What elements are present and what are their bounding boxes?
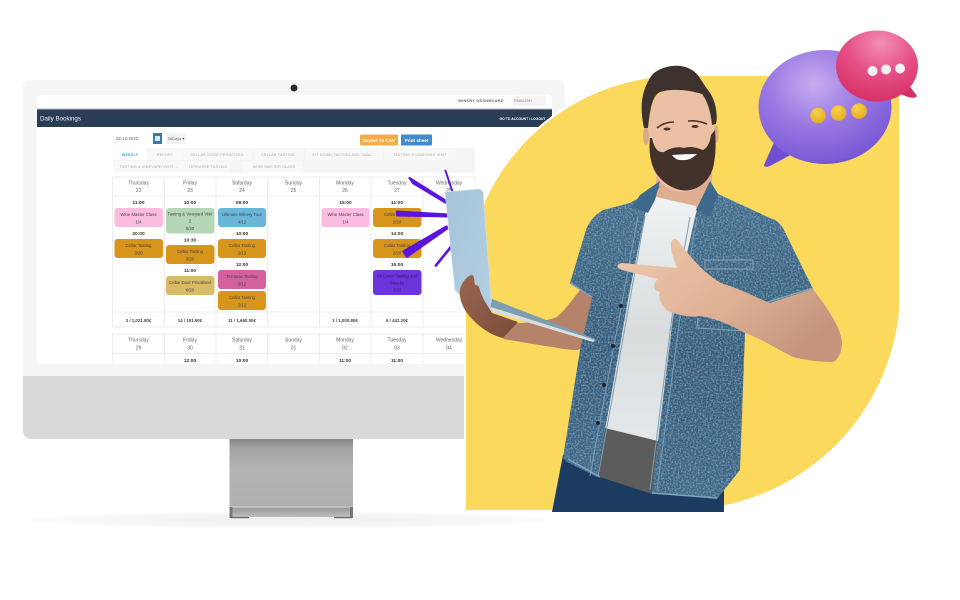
neck	[655, 165, 712, 212]
calendar week 1 day headers: Thursday	[128, 180, 149, 186]
calendar week 1 day headers: 22	[136, 188, 141, 194]
tabs	[113, 148, 475, 173]
calendar week 2: Monday	[336, 338, 354, 344]
calendar week 2: 30	[187, 346, 193, 352]
camera	[290, 84, 298, 92]
laptop base	[490, 299, 595, 341]
sleeve hems	[568, 283, 813, 498]
navy header bar	[37, 110, 552, 127]
Friday bookings: 5/20	[186, 226, 195, 231]
calendar week 1 day headers: Friday	[183, 180, 197, 186]
white t-shirt	[605, 196, 700, 441]
print button: Print sheet	[405, 138, 429, 143]
Thursday bookings: 1/4	[136, 220, 142, 224]
calendar week 2: 31	[239, 346, 245, 352]
tabs: TASTING & VINEYARD VISIT ...	[120, 165, 178, 169]
Tuesday bookings: Cellar Tasting	[384, 212, 411, 217]
tabs: CELLAR DOOR PRIVATISED	[190, 153, 244, 157]
Friday bookings: Cellar Door Privatised	[169, 280, 212, 285]
week 1 totals: 14 / 191.50€	[178, 318, 203, 323]
man holding laptop	[445, 66, 842, 512]
pockets	[697, 260, 753, 331]
monitor body	[23, 80, 565, 439]
Tuesday bookings: 15:00	[391, 262, 403, 268]
Tuesday bookings: 14:00	[391, 231, 403, 237]
calendar week 2: 11:00	[391, 358, 403, 364]
export button: Export To CSV	[363, 138, 396, 143]
Saturday bookings: Cellar Tasting	[229, 295, 256, 300]
Friday bookings: 10:30	[184, 238, 196, 244]
left forearm	[503, 290, 596, 350]
week 1 totals: 11 / 1,660.00€	[228, 318, 256, 323]
navy header bar: Daily Bookings	[40, 116, 81, 122]
calendar week 2	[112, 334, 475, 364]
Friday bookings: Cellar Tasting	[177, 249, 204, 254]
Tuesday bookings: 11:00	[391, 200, 403, 206]
purple highlight rays	[397, 170, 453, 267]
calendar week 2: 10:00	[236, 358, 248, 364]
navy header bar: GO TO ACCOUNT / LOGOUT	[500, 117, 546, 121]
calendar week 2: Saturday	[232, 338, 253, 344]
week 1 totals: 1 / 1,000.80€	[332, 318, 358, 323]
Saturday bookings: 12:00	[236, 262, 248, 268]
date controls	[116, 133, 186, 144]
calendar week 1 day headers: 25	[291, 188, 296, 194]
screen: bookings app	[37, 95, 552, 364]
Friday bookings: 11:00	[184, 268, 196, 274]
yellow background shape	[466, 76, 899, 510]
Tuesday bookings: Cellar Tasting	[384, 243, 411, 248]
calendar week 1 day headers: Monday	[336, 180, 354, 186]
white dots	[868, 64, 905, 76]
Tuesday bookings: Sit Down Tasting and	[377, 274, 418, 278]
tabs: CELLAR TASTING	[261, 153, 295, 157]
plackets	[590, 216, 697, 490]
Saturday bookings: 2/12	[238, 302, 247, 308]
Friday bookings: 10:00	[184, 200, 196, 206]
hair	[642, 66, 717, 128]
monitor shadow	[15, 511, 565, 529]
chat bubble pink	[836, 30, 918, 102]
week 1 totals: 3 / 1,021.80€	[126, 318, 152, 323]
calendar week 1 day headers: Saturday	[232, 180, 253, 186]
top bar: WINERY DASHBOARD	[458, 99, 504, 103]
Saturday bookings: Ultimate Winery Tour	[222, 212, 262, 217]
grey undershirt	[597, 428, 658, 494]
chat bubble purple	[758, 50, 892, 167]
Thursday bookings	[114, 200, 163, 258]
tabs: SIT DOWN TASTING AND SNAC...	[312, 153, 376, 157]
calendar week 1 day headers	[128, 180, 463, 194]
Tuesday bookings: 2/20	[393, 250, 402, 256]
laptop lid	[445, 189, 492, 311]
laptop base edge	[490, 307, 595, 342]
Saturday bookings: 5/12	[238, 282, 247, 286]
Thursday bookings: 20:00	[132, 231, 145, 237]
beard	[649, 130, 716, 190]
export button	[360, 134, 398, 146]
Tuesday bookings	[373, 200, 422, 295]
top bar	[37, 96, 552, 110]
calendar week 1 day headers: 27	[394, 188, 400, 194]
calendar week 2: 01	[291, 346, 296, 352]
face	[648, 89, 714, 192]
Saturday bookings: Cellar Tasting	[229, 243, 256, 248]
print button	[401, 134, 432, 146]
calendar week 1 day headers: 26	[342, 188, 348, 194]
collar	[632, 181, 660, 213]
Thursday bookings: 3/20	[134, 250, 143, 256]
Monday bookings: Wine Master Class	[327, 212, 364, 217]
calendar week 1 day headers: 24	[239, 188, 245, 194]
monitor stand	[230, 439, 353, 518]
Monday bookings	[322, 200, 370, 227]
calendar week 2: 29	[136, 346, 141, 352]
Tuesday bookings: 2/12	[393, 288, 402, 292]
Tuesday bookings: Snacks	[390, 280, 404, 286]
calendar week 2: Thursday	[128, 338, 149, 344]
Saturday bookings: Terrasse Tasting	[226, 274, 258, 279]
Friday bookings: 3/20	[186, 256, 195, 262]
date controls: 28Days ▾	[168, 136, 184, 141]
Tuesday bookings: 2/20	[393, 220, 402, 224]
Saturday bookings: 09:00	[236, 200, 248, 206]
Saturday bookings	[218, 200, 266, 310]
Monday bookings: 15:00	[339, 200, 352, 206]
date controls: 22-12-2022	[116, 136, 139, 141]
yellow dots	[810, 103, 867, 123]
smile	[672, 154, 697, 160]
Saturday bookings: 2/12	[238, 250, 247, 256]
calendar week 1 day headers: Tuesday	[388, 180, 407, 186]
calendar week 2: 03	[394, 346, 400, 352]
eyes and brows	[657, 121, 707, 130]
calendar week 1 day headers: 28	[446, 188, 452, 194]
calendar week 2: Sunday	[285, 338, 302, 344]
Friday bookings	[166, 200, 214, 295]
ears	[643, 125, 718, 145]
tabs: WEEKLY	[122, 153, 139, 157]
tabs: WINE MASTER CLASS	[253, 165, 296, 169]
pointing arm and hand	[618, 239, 842, 362]
Friday bookings: Tasting & Vineyard Visit	[168, 212, 213, 216]
Saturday bookings: 4/12	[238, 220, 247, 224]
tabs: TASTING & VINEYARD VISIT	[393, 153, 447, 157]
denim shirt	[563, 181, 813, 499]
Thursday bookings: Wine Master Class	[120, 212, 157, 217]
calendar week 2: 12:00	[184, 358, 196, 364]
Friday bookings: 2	[189, 218, 192, 224]
calendar week 2: Tuesday	[388, 338, 407, 344]
Thursday bookings: Cellar Tasting	[126, 243, 152, 248]
calendar week 2: 04	[446, 346, 452, 352]
calendar week 2: Friday	[183, 338, 197, 344]
tabs: TERRASSE TASTING	[188, 165, 228, 169]
Monday bookings: 1/4	[343, 220, 349, 224]
top bar: ENGLISH	[514, 98, 532, 103]
calendar week 1 day headers: Wednesday	[436, 180, 463, 186]
calendar week 1 day headers: 23	[187, 188, 193, 194]
calendar week 1 grid	[112, 177, 475, 327]
week 1 totals: 6 / 442.20€	[386, 318, 409, 323]
left hand	[460, 275, 518, 338]
Saturday bookings: 10:00	[236, 231, 248, 237]
calendar week 2: Wednesday	[436, 338, 463, 344]
Friday bookings: 6/20	[186, 288, 195, 292]
calendar week 2: 11:00	[339, 358, 351, 364]
calendar week 1 day headers: Sunday	[285, 180, 302, 186]
Thursday bookings: 11:00	[132, 200, 145, 206]
jeans	[552, 455, 724, 512]
calendar week 2: 02	[342, 346, 348, 352]
week 1 totals	[126, 318, 409, 323]
tabs: REPORT	[157, 153, 174, 157]
buttons	[596, 304, 623, 425]
